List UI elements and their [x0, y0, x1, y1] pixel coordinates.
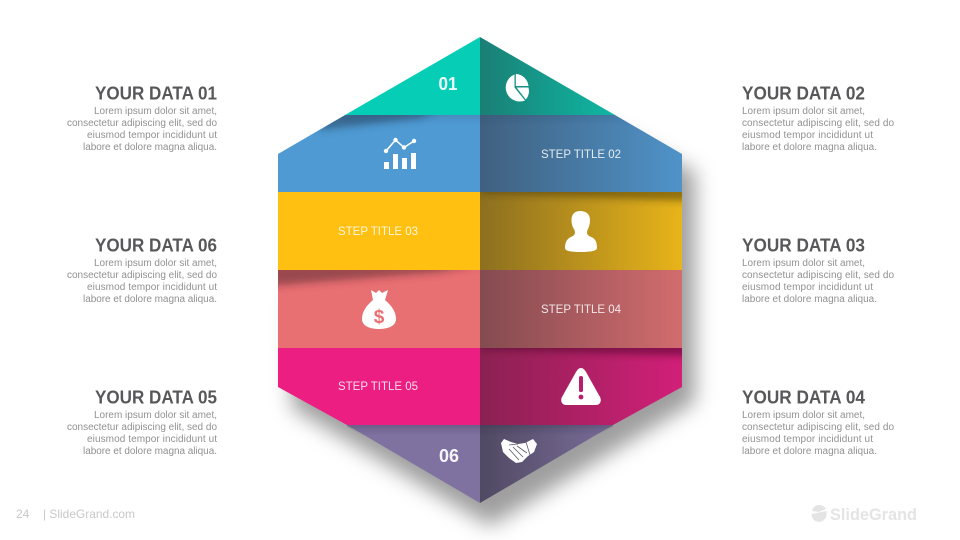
block: your data 06: YOUR DATA 06	[95, 236, 217, 256]
block: your data 02: YOUR DATA 02	[742, 84, 865, 104]
block: your data 04	[742, 388, 894, 457]
block: your data 02	[742, 84, 894, 153]
step title 04: STEP TITLE 04	[541, 302, 621, 316]
icon: line and bar chart	[384, 138, 416, 169]
icon: warning triangle	[561, 368, 601, 405]
block: your data 06: eiusmod tempor incididunt ut	[87, 282, 217, 293]
segment 03 left	[278, 192, 480, 270]
segment 05 left	[278, 348, 480, 425]
number 06: 06	[439, 446, 459, 466]
number 01: 01	[438, 74, 458, 94]
block: your data 01: Lorem ipsum dolor sit amet,	[94, 106, 217, 117]
block: your data 01: eiusmod tempor incididunt ut	[87, 130, 217, 141]
block: your data 02: consectetur adipiscing elit, sed do	[742, 118, 894, 129]
segment 02 left	[278, 115, 480, 192]
hexagon drop shadow	[292, 70, 695, 526]
segment 06 left	[347, 425, 480, 503]
block: your data 03	[742, 236, 894, 305]
icon: money bag: $	[374, 307, 385, 328]
step title 05: STEP TITLE 05	[338, 379, 418, 393]
block: your data 06	[67, 236, 217, 305]
block: your data 01: labore et dolore magna aliqua.	[83, 142, 217, 153]
segment 06 right	[480, 425, 613, 503]
block: your data 05: eiusmod tempor incididunt ut	[87, 434, 217, 445]
icon: pie chart	[506, 74, 529, 102]
block: your data 06: Lorem ipsum dolor sit amet,	[94, 258, 217, 269]
segment 03 right	[480, 192, 682, 270]
block: your data 02: eiusmod tempor incididunt ut	[742, 130, 873, 141]
hexagon diagram	[270, 37, 690, 503]
block: your data 04: YOUR DATA 04	[742, 388, 865, 408]
block: your data 03: consectetur adipiscing elit, sed do	[742, 270, 894, 281]
icon: handshake	[501, 439, 537, 463]
block: your data 06: consectetur adipiscing elit, sed do	[67, 270, 217, 281]
block: your data 05: YOUR DATA 05	[95, 388, 217, 408]
icon: person	[565, 211, 597, 252]
segment 04 right	[480, 270, 682, 348]
block: your data 05: labore et dolore magna aliqua.	[83, 446, 217, 457]
segment 04 left	[278, 270, 480, 348]
segment 01 right	[480, 37, 615, 115]
segment 01 left	[345, 37, 480, 115]
block: your data 03: Lorem ipsum dolor sit amet,	[742, 258, 865, 269]
block: your data 04: Lorem ipsum dolor sit amet,	[742, 410, 865, 421]
block: your data 06: labore et dolore magna aliqua.	[83, 294, 217, 305]
step title 03: STEP TITLE 03	[338, 224, 418, 238]
block: your data 01: consectetur adipiscing elit, sed do	[67, 118, 217, 129]
block: your data 02: labore et dolore magna aliqua.	[742, 142, 877, 153]
block: your data 05: consectetur adipiscing elit, sed do	[67, 422, 217, 433]
segment 05 right	[480, 348, 682, 425]
segment 02 right	[480, 115, 682, 192]
step title 02: STEP TITLE 02	[541, 147, 621, 161]
block: your data 03: YOUR DATA 03	[742, 236, 865, 256]
block: your data 05: Lorem ipsum dolor sit amet,	[94, 410, 217, 421]
block: your data 02: Lorem ipsum dolor sit amet,	[742, 106, 865, 117]
footer: page number and site: | SlideGrand.com	[43, 507, 135, 521]
block: your data 03: labore et dolore magna aliqua.	[742, 294, 877, 305]
block: your data 01: YOUR DATA 01	[95, 84, 217, 104]
footer: page number and site: 24	[16, 507, 30, 521]
icon: money bag	[362, 290, 396, 329]
block: your data 04: labore et dolore magna aliqua.	[742, 446, 877, 457]
inner fold shadows	[270, 108, 690, 428]
block: your data 04: eiusmod tempor incididunt ut	[742, 434, 873, 445]
block: your data 01	[67, 84, 217, 153]
block: your data 03: eiusmod tempor incididunt ut	[742, 282, 873, 293]
footer: logo: SlideGrand	[830, 505, 917, 524]
block: your data 05	[67, 388, 217, 457]
block: your data 04: consectetur adipiscing elit, sed do	[742, 422, 894, 433]
